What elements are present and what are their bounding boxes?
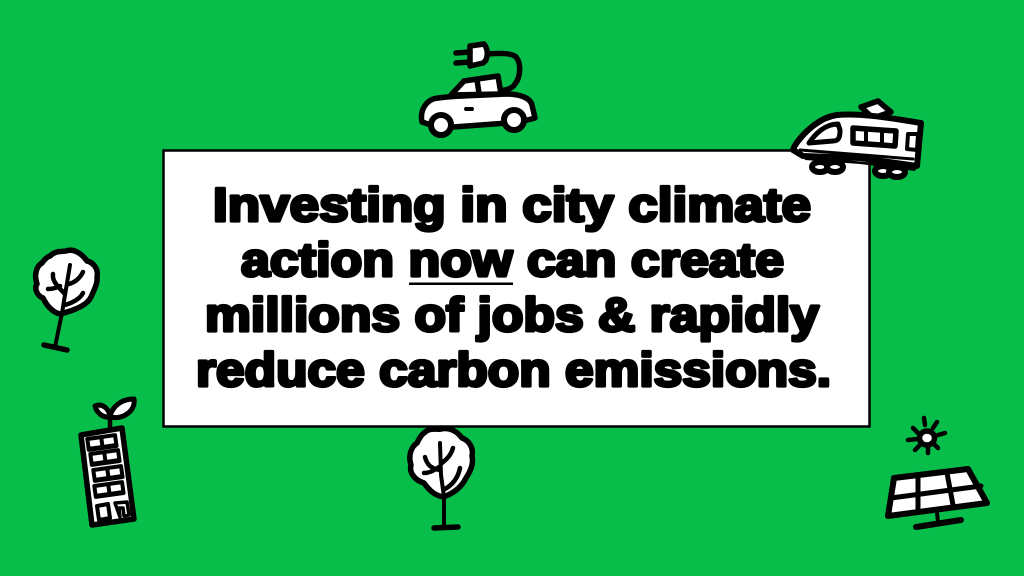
headline: action now can create bbox=[241, 233, 784, 286]
headline: Investing in city climate bbox=[213, 178, 811, 231]
icon: electric car with plug bbox=[421, 44, 535, 135]
headline bbox=[196, 178, 831, 396]
headline: millions of jobs & rapidly bbox=[205, 288, 819, 341]
headline: reduce carbon emissions. bbox=[196, 343, 831, 396]
icon: tree left bbox=[36, 250, 97, 350]
icon: sun bbox=[908, 418, 945, 453]
icon: solar panel bbox=[888, 469, 987, 527]
icon: train bbox=[793, 101, 921, 177]
icon: building with leaves bbox=[81, 399, 134, 525]
panel: headline box bbox=[164, 150, 870, 426]
icon: tree centre bbox=[410, 428, 473, 528]
